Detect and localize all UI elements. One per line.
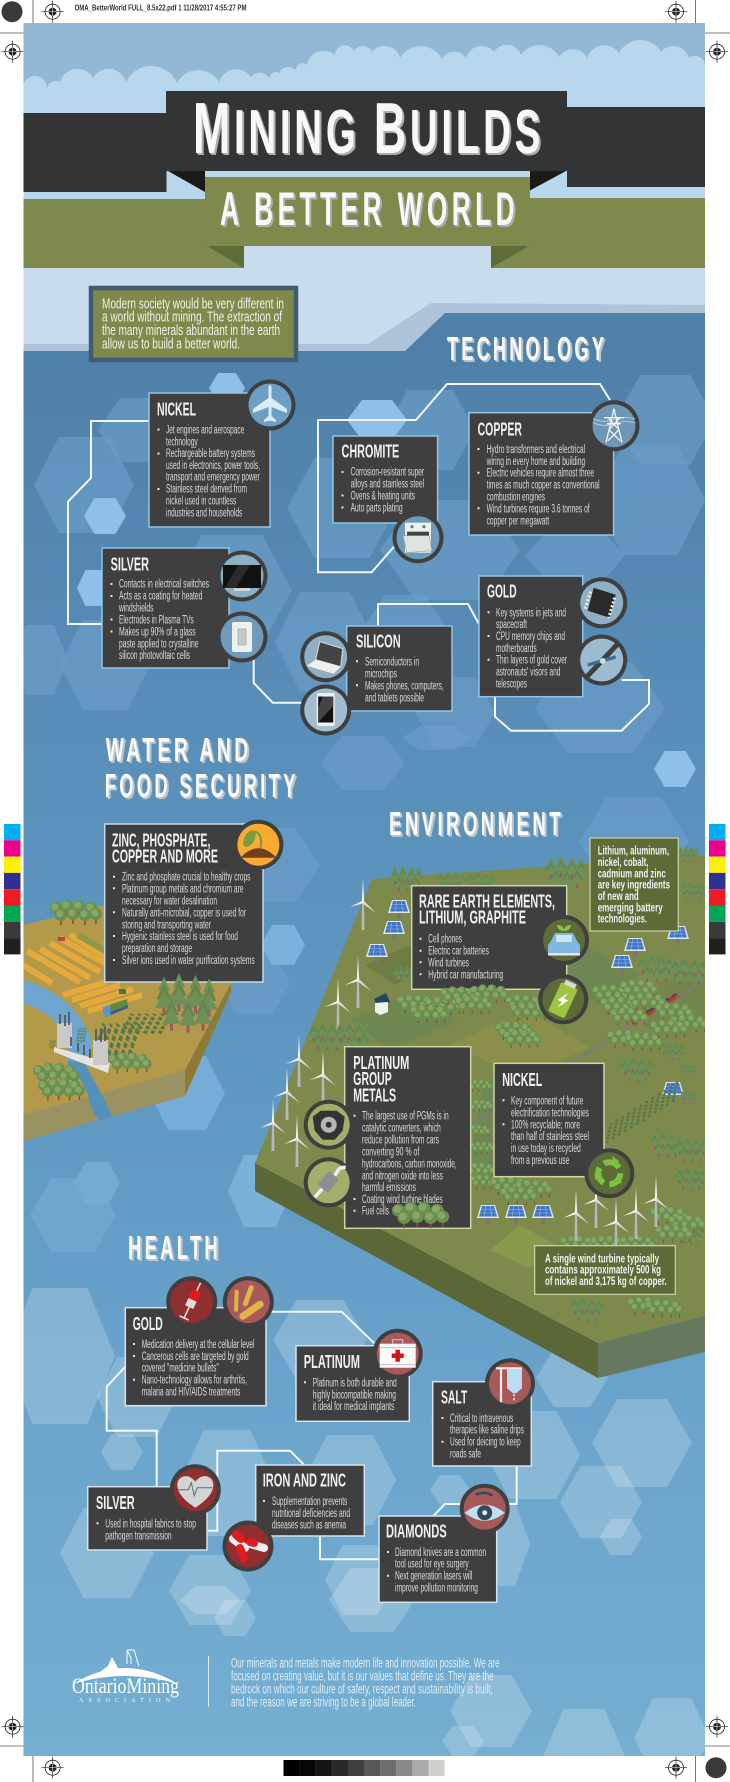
heading: water and food security: WATER AND (106, 731, 252, 768)
tractor green (119, 989, 126, 994)
bullet list: The largest use of PGMs is in (362, 1111, 449, 1123)
bullet list: combustion engines (487, 492, 545, 504)
icon: smartphone (300, 684, 351, 736)
panel: gold (479, 576, 627, 697)
icon: engine (304, 1100, 354, 1150)
footer text: focused on creating value, but it is our values that define us. They are the (231, 1668, 494, 1684)
heading: water and food security (105, 731, 299, 804)
land surface (255, 855, 705, 1343)
bullet list: in use today is recycled (511, 1143, 581, 1155)
panel: platinum group metals (304, 1047, 471, 1228)
bullet list: Thin layers of gold cover (496, 655, 567, 667)
dark ribbon (24, 91, 705, 192)
bullet list: 100% recyclable; more (511, 1119, 580, 1131)
bullet list: transport and emergency power (166, 472, 260, 484)
heading: GOLD (487, 580, 517, 602)
bullet list: Key systems in jets and (496, 607, 566, 619)
heading: water and food security: FOOD SECURITY (105, 767, 299, 804)
icon: recycling (584, 1148, 634, 1198)
bullet list: Wind turbines require 3.6 tonnes of (487, 503, 590, 515)
panel: rare earth elements (412, 886, 589, 1024)
panel: salt (433, 1358, 535, 1466)
bullet list: wiring in every home and building (486, 456, 585, 468)
connector lines: health (107, 1312, 517, 1559)
bullet list: Rechargeable battery systems (166, 448, 255, 460)
bullet list: Cancerous cells are targeted by gold (142, 1351, 249, 1363)
icon: light switch (216, 612, 268, 662)
olive ribbon (24, 177, 705, 268)
callout: battery ingredients: Lithium, aluminum, (598, 844, 669, 858)
heading: SILICON (356, 630, 401, 652)
bullet list: Silver ions used in water purification systems (122, 955, 255, 967)
bullet list (502, 1095, 589, 1167)
footer divider (208, 1656, 210, 1707)
icon: television (216, 550, 268, 602)
bullet list: Makes phones, computers, (365, 680, 444, 692)
solar panels (366, 900, 689, 1224)
train (632, 995, 678, 1023)
bullet list: Naturally anti-microbial, copper is used for (122, 907, 246, 919)
heading: NICKEL (157, 398, 196, 420)
printer slug line: OMA_BetterWorld FULL_8.5x22.pdf 1 11/28/2017 4:55:27 PM (74, 4, 247, 12)
bullet list: Coating wind turbine blades (362, 1194, 443, 1206)
icon: battery (538, 974, 588, 1024)
heading: RARE EARTH ELEMENTS, (419, 890, 555, 912)
icon: syringe (166, 1276, 217, 1327)
bullet list: Platinum is both durable and (313, 1377, 397, 1389)
connector lines: technology (68, 384, 649, 731)
logo: Ontario Mining Association (72, 1650, 179, 1704)
bullet list: used in electronics, power tools, (166, 460, 260, 472)
colour bar left (4, 824, 20, 954)
bullet list: roads safe (450, 1448, 481, 1460)
bullet list: reduce pollution from cars (362, 1135, 439, 1147)
bullet list (263, 1496, 350, 1532)
bullet list (133, 1339, 254, 1399)
bullet list: windshields (118, 602, 154, 614)
footer text: bedrock on which our culture of safety, respect and sustainability is built, (231, 1682, 493, 1696)
crop rows (607, 1082, 677, 1143)
icon: medicine bullets (223, 1276, 274, 1327)
bullet list: electrification technologies (511, 1107, 589, 1119)
bullet list: spacecraft (496, 619, 527, 631)
icon: first aid kit (373, 1329, 423, 1379)
bullet list: Used for deicing to keep (450, 1437, 521, 1449)
bullet list: Wind turbines (428, 957, 469, 969)
logo: Ontario Mining Association: ASSOCIATION (79, 1698, 171, 1704)
bullet list: Supplementation prevents (272, 1496, 347, 1508)
bullet list: malaria and HIV/AIDS treatments (142, 1387, 241, 1399)
bullet list (488, 607, 567, 691)
bullet list: Hybrid car manufacturing (428, 969, 503, 981)
heading: PLATINUM (353, 1052, 409, 1073)
heading: SILVER (96, 1492, 135, 1513)
icon: pills (222, 1520, 274, 1572)
background hexagons: health and footer (5, 1288, 710, 1782)
callout: battery ingredients: nickel, cobalt, (598, 855, 648, 869)
island surface (23, 905, 231, 1115)
pine trees in front of zinc card (155, 973, 218, 1032)
heading: health: HEALTH (128, 1229, 221, 1266)
heading: SALT (441, 1386, 468, 1408)
bullet list: Key component of future (511, 1095, 583, 1107)
bullet list: Jet engines and aerospace (166, 424, 244, 436)
bullet list: copper per megawatt (487, 515, 550, 527)
heading: COPPER (478, 418, 522, 440)
intro box: allow us to build a better world. (102, 336, 240, 352)
bullet list (304, 1377, 397, 1413)
callout: battery ingredients: cadmium and zinc (598, 866, 666, 880)
icon: catalytic converter (304, 1157, 354, 1207)
dam (54, 1012, 110, 1073)
field patches (350, 937, 705, 1268)
bullet list: harmful emissions (362, 1182, 416, 1194)
bullet list: covered "medicine bullets" (142, 1363, 219, 1375)
farm island (23, 900, 231, 1141)
heading: ZINC, PHOSPHATE, (112, 830, 210, 850)
bullet list: nickel used in countless (166, 495, 237, 507)
bullet list (342, 467, 424, 514)
heading: LITHIUM, GRAPHITE (419, 906, 526, 928)
panel: nickel environment (494, 1063, 634, 1198)
heading: PLATINUM (304, 1351, 360, 1372)
heading: GOLD (133, 1313, 163, 1334)
bullet list: Nano-technology allows for arthritis, (142, 1375, 247, 1387)
panel: silicon (300, 626, 452, 736)
bullet list: times as much copper as conventional (487, 480, 600, 492)
panel: iron and zinc (222, 1465, 364, 1572)
icon: electric car (539, 915, 589, 965)
icon: wilting plant (233, 820, 283, 870)
bullet list: Fuel cells (362, 1206, 389, 1218)
bullet list: industries and households (166, 507, 242, 519)
bullet list: alloys and stainless steel (351, 479, 424, 491)
logo: Ontario Mining Association: OntarioMining (72, 1673, 179, 1698)
bullet list: telescopes (496, 679, 527, 691)
bullet list (478, 444, 600, 527)
bullet list: Electric car batteries (428, 946, 489, 958)
panel: chromite (333, 436, 444, 563)
heading: METALS (353, 1084, 396, 1106)
icon: laptop (300, 631, 351, 682)
bullet list: than half of stainless steel (511, 1131, 589, 1143)
round trees (33, 900, 152, 1101)
bullet list: Platinum group metals and chromium are (122, 883, 244, 895)
bullet list (442, 1413, 524, 1460)
panel: platinum health (296, 1329, 423, 1421)
footer text: and the reason we are striving to be a global leader. (231, 1694, 416, 1710)
bullet list: astronauts' visors and (496, 667, 560, 679)
icon: transmission tower (588, 400, 640, 451)
field stripes (23, 935, 142, 1011)
bullet list: catalytic converters, which (362, 1123, 441, 1135)
colour bar right (709, 824, 726, 954)
bullet list: hydrocarbons, carbon monoxide, (362, 1158, 457, 1170)
panel: zinc, phosphate, copper and more (105, 820, 283, 982)
callout: battery ingredients (590, 838, 678, 931)
bullet list: tool used for eye surgery (395, 1559, 469, 1571)
bullet list: Auto parts plating (351, 502, 403, 514)
bullet list (356, 656, 444, 704)
callout: wind turbine metals (535, 1246, 675, 1294)
bullet list (113, 872, 255, 967)
bullet list: Acts as a coating for heated (119, 591, 202, 603)
bullet list: Hydro transformers and electrical (487, 444, 585, 456)
bullet list (420, 934, 503, 981)
railway (470, 980, 705, 1125)
bullet list: Critical to intravenous (450, 1413, 513, 1425)
footer text (231, 1656, 500, 1710)
bullet list: paste applied to crystalline (119, 638, 198, 650)
intro box: the many minerals abundant in the earth (102, 322, 280, 339)
bullet list: Stainless steel derived from (166, 484, 247, 496)
bullet list: Electric vehicles require almost three (487, 468, 594, 480)
pine trees (308, 845, 709, 1322)
trees on platinum card (392, 1202, 449, 1228)
bullet list: Contacts in electrical switches (119, 579, 209, 591)
bullet list (158, 424, 260, 519)
heading: SILVER (111, 554, 149, 574)
callout: battery ingredients: technologies. (598, 911, 647, 925)
bullet list: Makes up 90% of a glass (119, 626, 196, 638)
bullet list: Corrosion-resistant super (351, 467, 424, 479)
icon: microchip (576, 577, 627, 628)
bullet list: highly biocompatible making (313, 1389, 396, 1401)
environment land (255, 845, 709, 1378)
bullet list: and tablets possible (365, 692, 424, 704)
wind turbines lower right (563, 1175, 669, 1250)
bullet list: Cell phones (428, 934, 462, 946)
icon: eye (460, 1484, 510, 1534)
heading: DIAMONDS (386, 1520, 447, 1542)
intro box (91, 288, 296, 360)
bullet list: from a previous use (511, 1155, 569, 1167)
footer text: Our minerals and metals make modern life and innovation possible. We are (231, 1656, 500, 1670)
bullet list (110, 579, 209, 662)
round trees in front of rare earth card (440, 984, 509, 1014)
heading: COPPER AND MORE (112, 846, 218, 866)
round trees (397, 979, 709, 1318)
icon: heart monitor (170, 1464, 221, 1515)
panel: diamonds (379, 1484, 510, 1602)
tractor (58, 937, 65, 941)
house (374, 993, 390, 1015)
bullet list: CPU memory chips and (496, 631, 565, 643)
bullet list: Semiconductors in (365, 656, 419, 668)
land sides (255, 1163, 705, 1378)
bullet list: necessary for water desalination (122, 895, 217, 907)
bullet list (354, 1111, 457, 1218)
bullet list: and nitrogen oxide into less (362, 1170, 443, 1182)
bullet list: preparation and storage (122, 943, 192, 955)
heading: GROUP (353, 1068, 392, 1089)
callout: battery ingredients: of new and (598, 889, 639, 903)
callout: wind turbine metals: of nickel and 3,175 kg of copper. (545, 1274, 667, 1288)
bullet list: storing and transporting water (122, 919, 211, 931)
bullet list: technology (166, 436, 198, 448)
title text: MINING BUILDS (193, 89, 544, 169)
bullet list: Hygienic stainless steel is used for food (122, 931, 238, 943)
grey scale bar (284, 1760, 445, 1776)
bullet list: improve pollution monitoring (395, 1583, 478, 1595)
river (23, 980, 112, 1121)
truck (103, 999, 128, 1017)
bullet list: Used in hospital fabrics to stop (105, 1518, 196, 1530)
wind turbines (260, 878, 376, 1167)
bullet list: it ideal for medical implants (313, 1401, 395, 1413)
bullet list: pathogen transmission (105, 1530, 172, 1542)
icon: airplane (244, 380, 296, 430)
bullet list (387, 1547, 486, 1595)
icon: satellite (576, 634, 627, 686)
bullet list: Zinc and phosphate crucial to healthy crops (122, 872, 251, 884)
bullet list: Ovens & heating units (351, 490, 415, 502)
bullet list: diseases such as anemia (272, 1520, 346, 1532)
heading: CHROMITE (342, 440, 399, 462)
intro box: Modern society would be very different in (102, 296, 284, 312)
bullet list: motherboards (496, 643, 537, 655)
bullet list: Next generation lasers will (395, 1571, 472, 1583)
intro box: a world without mining. The extraction of (102, 308, 283, 326)
bullet list: Diamond knives are a common (395, 1547, 486, 1559)
callout: battery ingredients: are key ingredients (598, 877, 670, 891)
bullet list: microchips (365, 668, 397, 680)
panel: copper (469, 400, 640, 535)
background hexagons: bright accents (30, 373, 696, 1252)
panel: gold health (125, 1276, 274, 1406)
bullet list: Medication delivery at the cellular level (142, 1339, 254, 1351)
panel: nickel (149, 380, 296, 527)
heading (112, 830, 218, 866)
crop rows (49, 1014, 170, 1055)
panel: silver health (88, 1464, 221, 1550)
callout: wind turbine metals: A single wind turbine typically (545, 1251, 659, 1265)
background hexagons: technology and water (12, 375, 715, 1015)
callout: wind turbine metals: contains approximately 500 kg (545, 1263, 661, 1277)
icon: saline drip (485, 1358, 535, 1408)
bullet list: Electrodes in Plasma TVs (119, 614, 194, 626)
bullet list (96, 1518, 196, 1542)
train windows (646, 993, 676, 1013)
island sides (23, 983, 231, 1141)
bullet list: converting 90 % of (362, 1146, 420, 1158)
heading: NICKEL (502, 1069, 542, 1090)
heading: IRON AND ZINC (263, 1470, 346, 1490)
panel: silver (102, 548, 268, 668)
heading (419, 890, 555, 928)
callout: battery ingredients: emerging battery (598, 900, 663, 914)
bullet list: nutritional deficiencies and (272, 1508, 350, 1520)
bullet list: silicon photovoltaic cells (119, 650, 190, 662)
heading: environment: ENVIRONMENT (389, 805, 564, 842)
title banner (24, 89, 705, 268)
bullet list: therapies like saline drips (450, 1425, 524, 1437)
heading (353, 1052, 409, 1106)
icon: oven (392, 512, 444, 563)
